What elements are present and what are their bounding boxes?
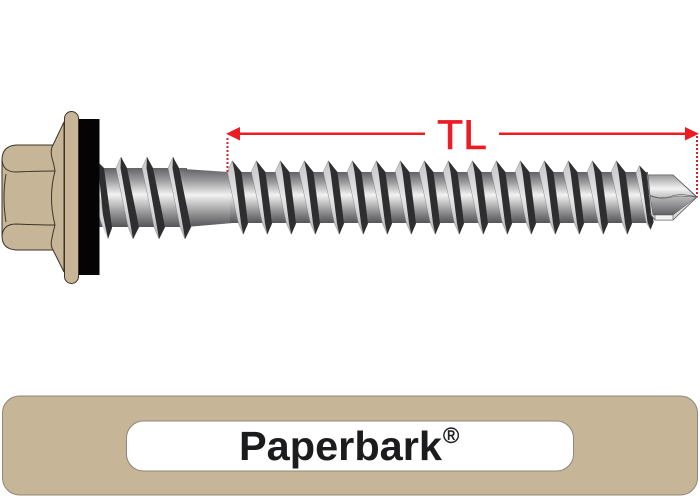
right arrow [499,127,699,140]
hex head and flange [2,112,78,284]
flange cone [51,122,64,272]
name plate [126,421,574,471]
flange rim [64,112,78,284]
TL label: TL [437,111,487,158]
colour name: Paperbark [239,423,442,469]
screw shank [99,168,648,227]
right dotted extension [696,136,698,197]
drill tip [647,175,697,220]
hex head [2,145,56,250]
black sealing washer [78,119,100,275]
dimension: TL [226,111,699,197]
hex facets [2,160,55,236]
first thread section [99,157,191,239]
registered mark: ® [443,423,459,448]
left dotted extension [226,138,228,172]
colour name bar [2,396,698,495]
main threads [227,161,654,234]
left arrow [226,127,425,140]
